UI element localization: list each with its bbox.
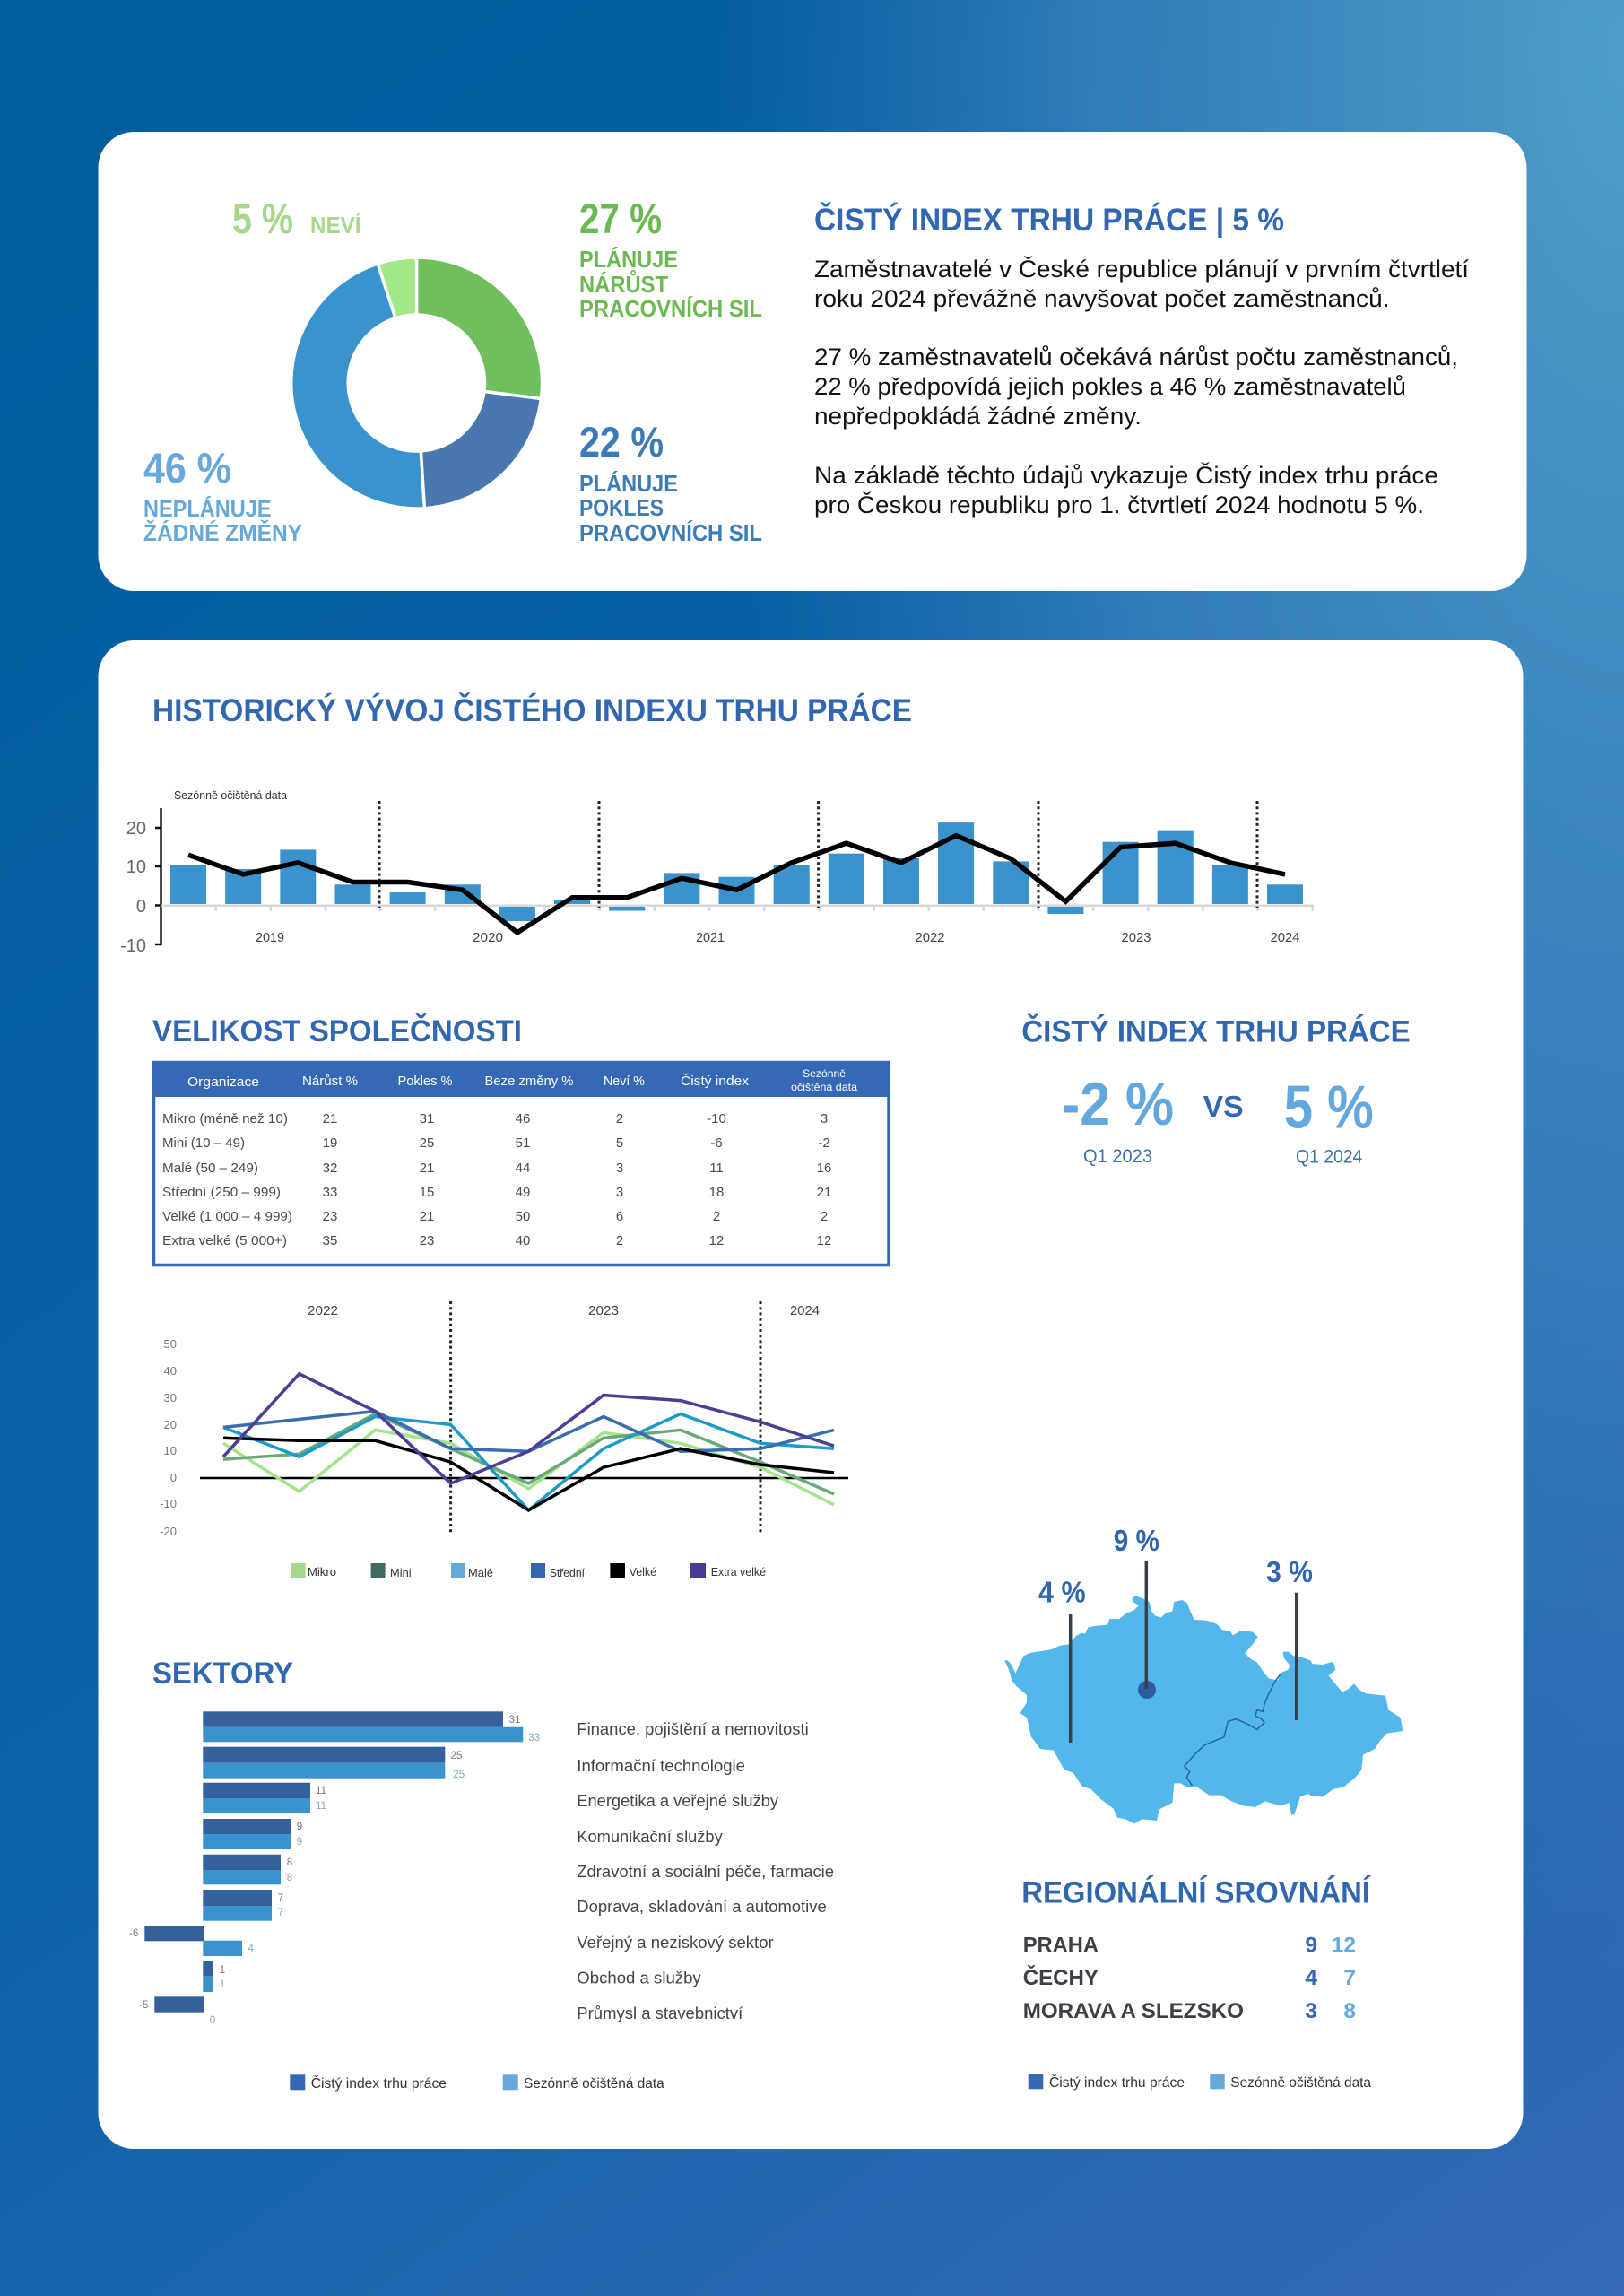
sector labels: Obchod a služby	[577, 1970, 701, 1987]
map shape	[1004, 1596, 1403, 1823]
year labels	[256, 930, 1300, 945]
table rows: Mini (10 – 49)	[162, 1135, 245, 1151]
summary text block: 27 % zaměstnavatelů očekává nárůst počtu zaměstnanců,	[814, 344, 1458, 370]
table rows: 21	[323, 1111, 337, 1126]
summary text block: pro Českou republiku pro 1. čtvrtletí 2024 hodnotu 5 %.	[814, 491, 1424, 518]
table rows: 15	[420, 1185, 434, 1200]
y axis: 0	[136, 897, 146, 917]
table rows: 50	[516, 1209, 530, 1224]
table header: očištěná data	[791, 1081, 857, 1093]
table rows: 49	[516, 1185, 530, 1200]
table rows: 46	[516, 1111, 530, 1126]
donut label: 22 % decline: PRACOVNÍCH SIL	[579, 519, 762, 546]
year separators	[379, 801, 1257, 908]
year labels	[308, 1303, 820, 1318]
summary text block: Zaměstnavatelé v České republice plánují v prvním čtvrtletí	[814, 255, 1470, 283]
table header	[187, 1067, 857, 1093]
y axis labels: 50	[164, 1337, 177, 1351]
year labels: 2024	[790, 1303, 820, 1318]
seasonally adjusted values	[1332, 1934, 1356, 2023]
note: seasonally adjusted: Sezónně očištěná data	[174, 788, 288, 802]
donut chart	[291, 257, 542, 509]
sector labels: Průmysl a stavebnictví	[577, 2005, 743, 2022]
summary text block: 22 % předpovídá jejich pokles a 46 % zaměstnavatelů	[814, 373, 1406, 400]
sector labels: Doprava, skladování a automotive	[577, 1898, 827, 1916]
table rows: -2	[818, 1135, 830, 1151]
legend: Čistý index trhu práce	[1049, 2074, 1185, 2091]
heading: historical development: HISTORICKÝ VÝVOJ ČISTÉHO INDEXU TRHU PRÁCE	[152, 692, 912, 728]
legend: Čistý index trhu práce	[311, 2074, 447, 2092]
table rows: 2	[821, 1209, 828, 1224]
dark bar values: 31	[509, 1715, 520, 1726]
net index values: 9	[1305, 1934, 1317, 1958]
table rows: 12	[817, 1233, 831, 1248]
table rows: 19	[323, 1135, 337, 1151]
map: Czech Republic regions	[1004, 1524, 1403, 1823]
table rows: 2	[616, 1233, 623, 1248]
summary text block: nepředpokládá žádné změny.	[814, 403, 1142, 430]
series lines	[223, 1374, 834, 1510]
donut label: 5 % don't know: NEVÍ	[310, 212, 361, 239]
year labels: 2019	[256, 930, 284, 945]
legend: Sezónně očištěná data	[1230, 2075, 1371, 2091]
heading: ČISTÝ INDEX TRHU PRÁCE	[1021, 1014, 1411, 1049]
value Q1 2023: -2 %	[1062, 1070, 1174, 1138]
y axis: 20	[126, 819, 146, 839]
y axis labels: -10	[160, 1497, 177, 1510]
year labels: 2020	[473, 930, 503, 945]
y axis labels	[160, 1337, 177, 1538]
table rows: 31	[420, 1111, 434, 1126]
dark bar values: -6	[129, 1928, 138, 1939]
legend	[291, 1563, 766, 1579]
table rows: 2	[616, 1111, 623, 1126]
sector labels: Finance, pojištění a nemovitosti	[577, 1720, 809, 1738]
seasonally adjusted values: 7	[1343, 1966, 1356, 1990]
legend: Střední	[550, 1566, 585, 1579]
y axis labels: 40	[164, 1364, 177, 1378]
table rows: 33	[323, 1185, 337, 1200]
y axis: 10	[126, 857, 146, 877]
donut label: 46 % no change	[143, 444, 302, 546]
legend	[290, 2074, 664, 2092]
donut label: 27 % growth	[579, 195, 762, 322]
light bar values: 9	[297, 1837, 302, 1848]
heading: net index 5 %: ČISTÝ INDEX TRHU PRÁCE | 5 %	[814, 202, 1284, 238]
dark bar values: 7	[278, 1893, 283, 1904]
light bar values: 11	[316, 1801, 326, 1812]
table rows: 40	[516, 1233, 530, 1248]
summary text block: roku 2024 převážně navyšovat počet zaměstnanců.	[814, 285, 1390, 312]
table rows: 2	[713, 1209, 720, 1224]
table: company size	[152, 1061, 890, 1265]
zero line	[200, 1477, 848, 1479]
table rows: 21	[420, 1209, 434, 1224]
dark bar values	[129, 1715, 520, 2011]
y axis labels: -20	[160, 1525, 177, 1538]
table rows	[162, 1111, 831, 1248]
region names: MORAVA A SLEZSKO	[1023, 1999, 1244, 2023]
dark bar values: -5	[139, 2000, 148, 2011]
table rows: 21	[817, 1185, 831, 1200]
year labels: 2023	[588, 1303, 619, 1318]
x axis	[161, 906, 1314, 911]
dark bar values: 11	[316, 1786, 326, 1796]
versus: VS	[1203, 1090, 1244, 1123]
table header: Čistý index	[681, 1074, 750, 1089]
table header: Pokles %	[398, 1074, 452, 1089]
heading: sectors: SEKTORY	[152, 1657, 293, 1691]
table header: Beze změny %	[484, 1074, 574, 1089]
legend: Sezónně očištěná data	[524, 2076, 664, 2092]
table rows: -6	[710, 1135, 723, 1151]
donut label: 27 % growth: 27 %	[579, 195, 662, 242]
donut label: 27 % growth: NÁRŮST	[579, 269, 668, 298]
year labels: 2023	[1121, 930, 1151, 945]
marker line: Moravia and Silesia	[1295, 1593, 1298, 1720]
table rows: 32	[323, 1161, 337, 1176]
map values: 9 %	[1114, 1524, 1159, 1557]
map values: 4 %	[1038, 1576, 1086, 1609]
dark bar values: 9	[297, 1822, 302, 1832]
sector labels: Zdravotní a sociální péče, farmacie	[577, 1863, 834, 1881]
Prague marker	[1138, 1561, 1156, 1699]
map values: 3 %	[1266, 1555, 1313, 1588]
donut label: 27 % growth: PRACOVNÍCH SIL	[579, 295, 762, 322]
donut label: 5 % don't know: 5 %	[232, 195, 293, 242]
bars	[170, 822, 1303, 921]
light bars: seasonally adjusted	[203, 1727, 523, 1992]
net index values: 3	[1305, 1999, 1317, 2023]
chart: index by company size	[160, 1301, 848, 1579]
map values	[1038, 1524, 1313, 1609]
table header: Organizace	[187, 1074, 259, 1090]
light bar values: 4	[248, 1944, 254, 1954]
table rows: Mikro (méně než 10)	[162, 1111, 288, 1126]
table rows: 51	[516, 1135, 530, 1151]
light bar values	[210, 1733, 540, 2026]
year labels: 2024	[1270, 930, 1300, 945]
table rows: Střední (250 – 999)	[162, 1185, 281, 1200]
table rows: Velké (1 000 – 4 999)	[162, 1209, 292, 1224]
sector labels: Informační technologie	[577, 1757, 745, 1775]
legend: Extra velké	[711, 1565, 766, 1578]
y axis labels: 20	[164, 1418, 177, 1431]
region names	[1023, 1934, 1244, 2023]
sector labels: Veřejný a neziskový sektor	[577, 1934, 774, 1952]
light bar values: 33	[528, 1733, 540, 1744]
light bar values: 1	[220, 1979, 225, 1990]
dark bar values: 25	[451, 1751, 462, 1761]
y axis	[120, 808, 161, 956]
donut label: 46 % no change: 46 %	[143, 444, 231, 491]
seasonally adjusted values: 12	[1332, 1934, 1356, 1958]
summary text block: Na základě těchto údajů vykazuje Čistý index trhu práce	[814, 461, 1438, 489]
table rows: 25	[420, 1135, 434, 1151]
donut label: 5 % don't know	[232, 195, 361, 242]
table rows: 44	[516, 1161, 530, 1176]
table rows: Malé (50 – 249)	[162, 1161, 258, 1176]
net index values	[1305, 1934, 1317, 2023]
value Q1 2024	[1284, 1074, 1374, 1168]
year labels: 2022	[915, 930, 945, 945]
dark bar values: 8	[287, 1857, 292, 1868]
panel: detail charts	[99, 640, 1523, 2149]
region names: PRAHA	[1023, 1934, 1099, 1958]
value Q1 2023	[1062, 1070, 1174, 1167]
comparison: net index Q1 2023 vs Q1 2024	[1021, 1014, 1411, 1168]
donut label: 27 % growth: PLÁNUJE	[579, 246, 678, 273]
table rows: 3	[616, 1161, 623, 1176]
summary text block	[814, 255, 1470, 518]
chart: sectors	[129, 1711, 834, 2092]
line: net index	[188, 836, 1285, 933]
table rows: -10	[707, 1111, 726, 1126]
table rows: 3	[821, 1111, 828, 1126]
legend: Malé	[468, 1566, 493, 1579]
legend: Mini	[390, 1566, 412, 1579]
year separators	[451, 1301, 760, 1534]
table header: Nárůst %	[302, 1074, 358, 1089]
heading: company size: VELIKOST SPOLEČNOSTI	[152, 1013, 522, 1048]
seasonally adjusted values: 8	[1343, 1999, 1356, 2023]
table rows: 6	[616, 1209, 623, 1224]
legend: Velké	[630, 1565, 656, 1578]
table rows: 12	[709, 1233, 724, 1248]
table rows: Extra velké (5 000+)	[162, 1233, 287, 1248]
table rows: 5	[616, 1135, 623, 1151]
year labels: 2021	[696, 930, 725, 945]
table header: Sezónně	[803, 1067, 846, 1080]
light bar values: 8	[287, 1873, 292, 1883]
donut label: 22 % decline: POKLES	[579, 494, 664, 521]
chart: historical net index bars and line	[120, 788, 1314, 956]
table rows: 21	[420, 1161, 434, 1176]
y axis labels: 30	[164, 1391, 177, 1405]
light bar values: 7	[278, 1908, 283, 1918]
year labels: 2022	[308, 1303, 338, 1318]
sector labels: Komunikační služby	[577, 1828, 723, 1846]
donut label: 46 % no change: NEPLÁNUJE	[143, 495, 271, 522]
panel: net labour index summary	[99, 132, 1526, 591]
donut label: 46 % no change: ŽÁDNÉ ZMĚNY	[143, 519, 302, 546]
heading: REGIONÁLNÍ SROVNÁNÍ	[1021, 1876, 1371, 1910]
legend	[1029, 2074, 1371, 2091]
value Q1 2024: 5 %	[1284, 1074, 1374, 1142]
net index values: 4	[1305, 1966, 1317, 1990]
table header: Neví %	[604, 1074, 645, 1089]
legend: Mikro	[308, 1565, 336, 1578]
table rows: 3	[616, 1185, 623, 1200]
y axis labels: 10	[164, 1444, 177, 1457]
light bar values: 25	[453, 1770, 465, 1780]
table rows: 11	[709, 1161, 724, 1176]
table rows: 23	[323, 1209, 337, 1224]
donut label: 22 % decline	[579, 418, 762, 546]
table rows: 23	[420, 1233, 434, 1248]
regional comparison	[1021, 1876, 1371, 2091]
y axis: -10	[120, 936, 146, 956]
table rows: 35	[323, 1233, 337, 1248]
y axis labels: 0	[170, 1471, 177, 1484]
donut label: 22 % decline: 22 %	[579, 418, 664, 465]
donut label: 22 % decline: PLÁNUJE	[579, 470, 678, 497]
value Q1 2023: Q1 2023	[1083, 1146, 1152, 1167]
region names: ČECHY	[1023, 1965, 1099, 1990]
value Q1 2024: Q1 2024	[1296, 1147, 1363, 1168]
light bar values: 0	[210, 2015, 215, 2026]
dark bars: net index	[144, 1711, 503, 2013]
dark bar values: 1	[220, 1965, 225, 1976]
table rows: 18	[709, 1185, 724, 1200]
marker line: Bohemia	[1069, 1614, 1072, 1743]
sector labels: Energetika a veřejné služby	[577, 1792, 778, 1810]
sector labels	[577, 1720, 834, 2022]
table rows: 16	[817, 1161, 831, 1176]
